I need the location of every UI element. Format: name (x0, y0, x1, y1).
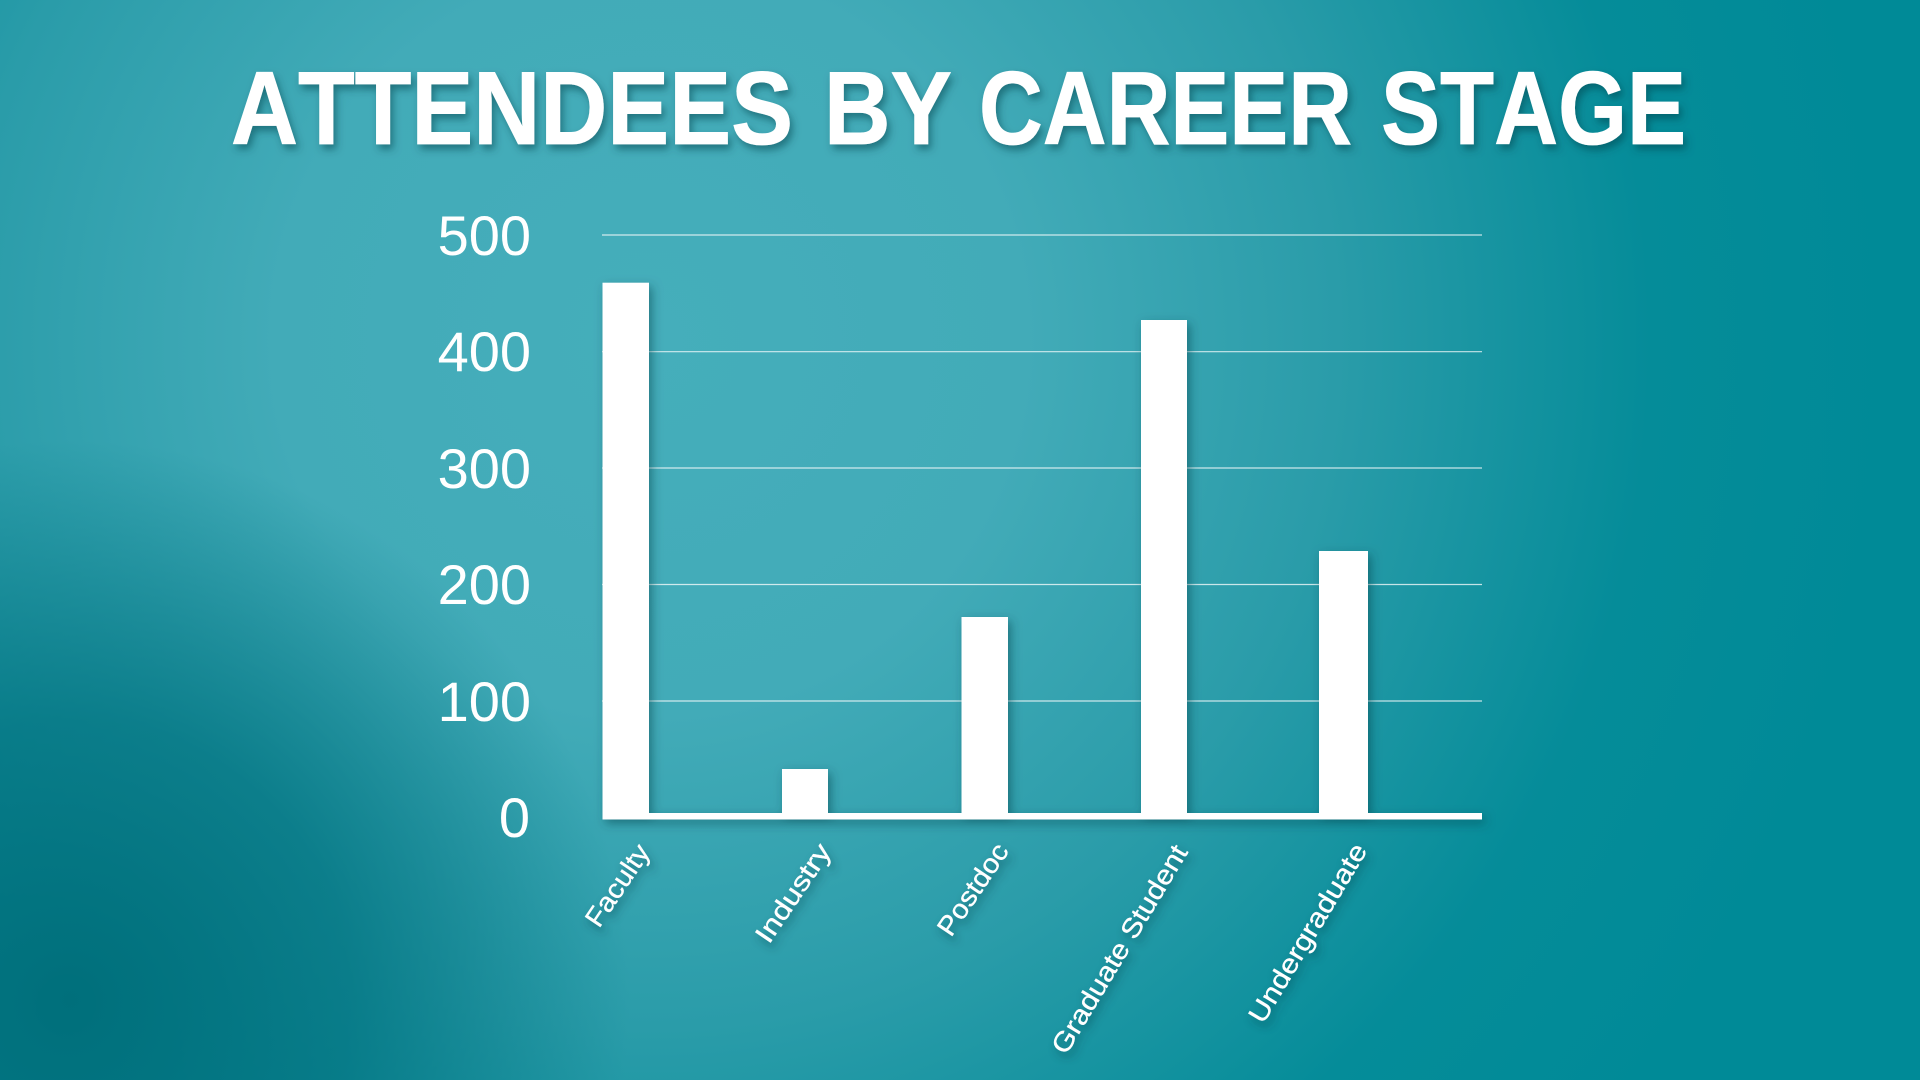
y axis labels: 0 (499, 786, 530, 849)
y axis labels: 100 (438, 670, 531, 733)
label: Graduate Student: Graduate Student (1045, 839, 1194, 1059)
bar: Postdoc (962, 617, 1008, 820)
title: CAREER (979, 51, 1352, 167)
y axis labels: 200 (438, 553, 531, 616)
title: STAGE (1381, 51, 1686, 167)
y axis labels (438, 204, 531, 849)
x axis labels (579, 837, 1373, 1059)
grid lines (602, 235, 1482, 701)
label: Faculty: Faculty (579, 838, 656, 932)
y axis labels: 500 (438, 204, 531, 267)
label: Industry: Industry (749, 837, 837, 948)
bar: Undergraduate (1319, 551, 1368, 820)
label: Postdoc: Postdoc (931, 838, 1015, 941)
y axis labels: 300 (438, 437, 531, 500)
label: Undergraduate: Undergraduate (1242, 838, 1373, 1028)
y axis labels: 400 (438, 320, 531, 383)
title: BY (824, 51, 952, 167)
bar: Industry (782, 769, 828, 820)
title (231, 51, 1686, 167)
bar chart: bars and baseline (602, 283, 1482, 820)
title: ATTENDEES (231, 51, 793, 167)
bar: Graduate Student (1141, 320, 1187, 820)
bar: Faculty (602, 283, 649, 820)
